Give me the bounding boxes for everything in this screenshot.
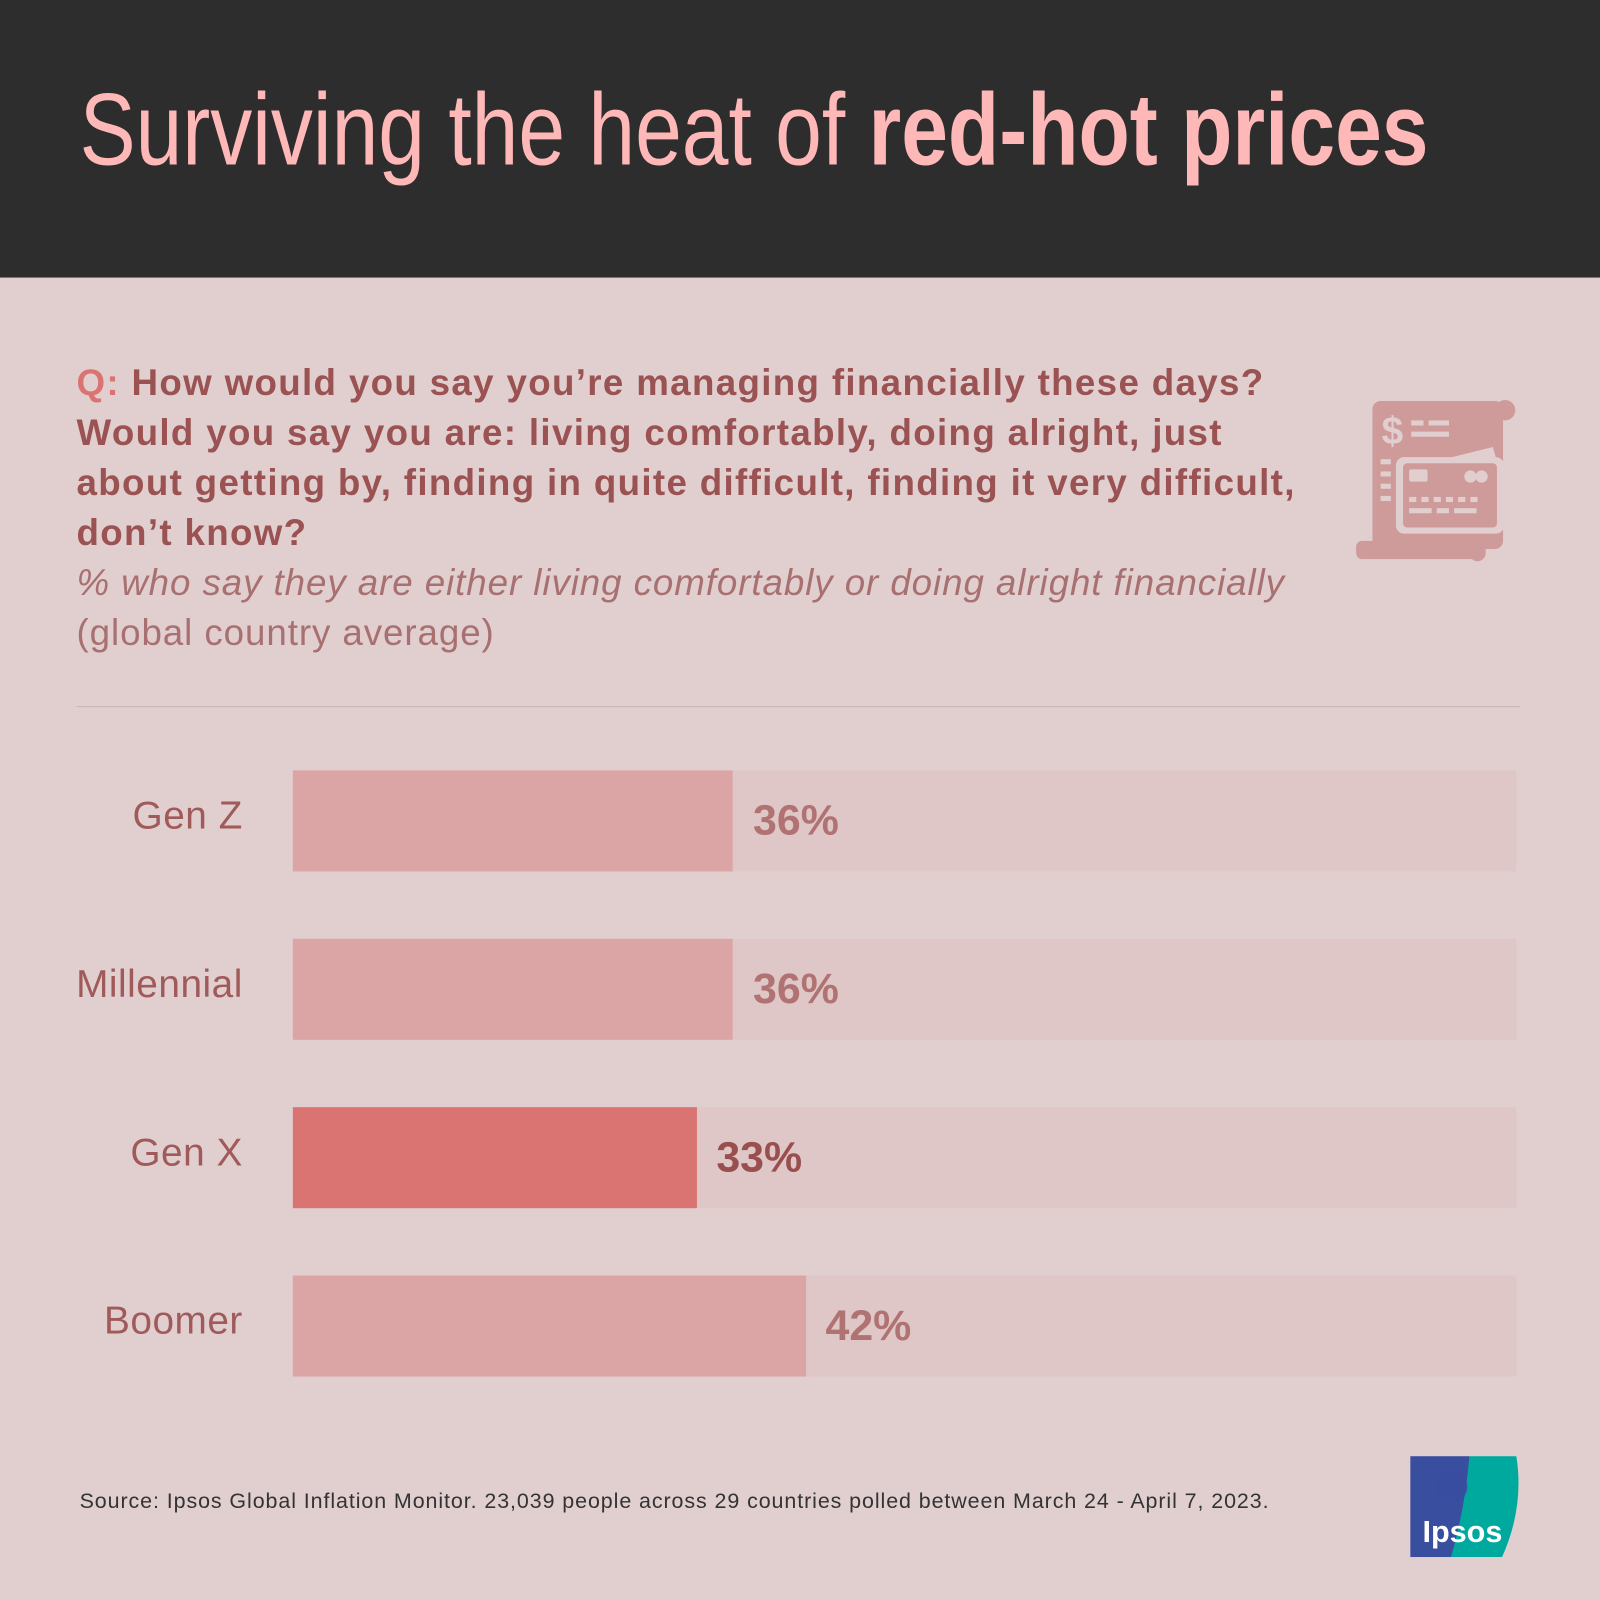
row: Gen X: 33% <box>716 1133 802 1181</box>
row: Gen X: Gen X <box>130 1132 243 1174</box>
header band <box>0 0 1600 278</box>
subtitle <box>77 561 1286 653</box>
icon: receipt with card: $ <box>1382 410 1404 453</box>
row: Gen Z: 36% <box>753 796 839 844</box>
question text: Q: How would you say you’re managing financially these days? Would you say you are: living comfortably, doing alright, just about getting by, finding in quite difficult, finding it very difficult, don’t know? <box>77 361 1296 553</box>
logo: Ipsos: Ipsos <box>1422 1515 1502 1549</box>
row: Millennial: 36% <box>753 964 839 1012</box>
title: Surviving the heat of red-hot prices <box>80 72 1429 187</box>
row: Boomer <box>104 1276 1516 1376</box>
row: Gen X <box>130 1107 1516 1208</box>
logo: Ipsos <box>1410 1456 1518 1558</box>
row: Boomer: Boomer <box>104 1300 243 1343</box>
subtitle: % who say they are either living comfortably or doing alright financially <box>77 561 1285 603</box>
source note: Source: Ipsos Global Inflation Monitor. 23,039 people across 29 countries polled between March 24 - April 7, 2023. <box>80 1490 1269 1513</box>
subtitle: (global country average) <box>77 611 495 653</box>
row: Boomer: 42% <box>826 1301 911 1349</box>
row: Gen Z: Gen Z <box>133 795 243 838</box>
row: Millennial <box>76 938 1516 1040</box>
icon: receipt with card <box>1356 400 1516 562</box>
row: Millennial: Millennial <box>76 963 243 1006</box>
row: Gen Z <box>133 770 1516 872</box>
bar chart <box>76 770 1516 1376</box>
